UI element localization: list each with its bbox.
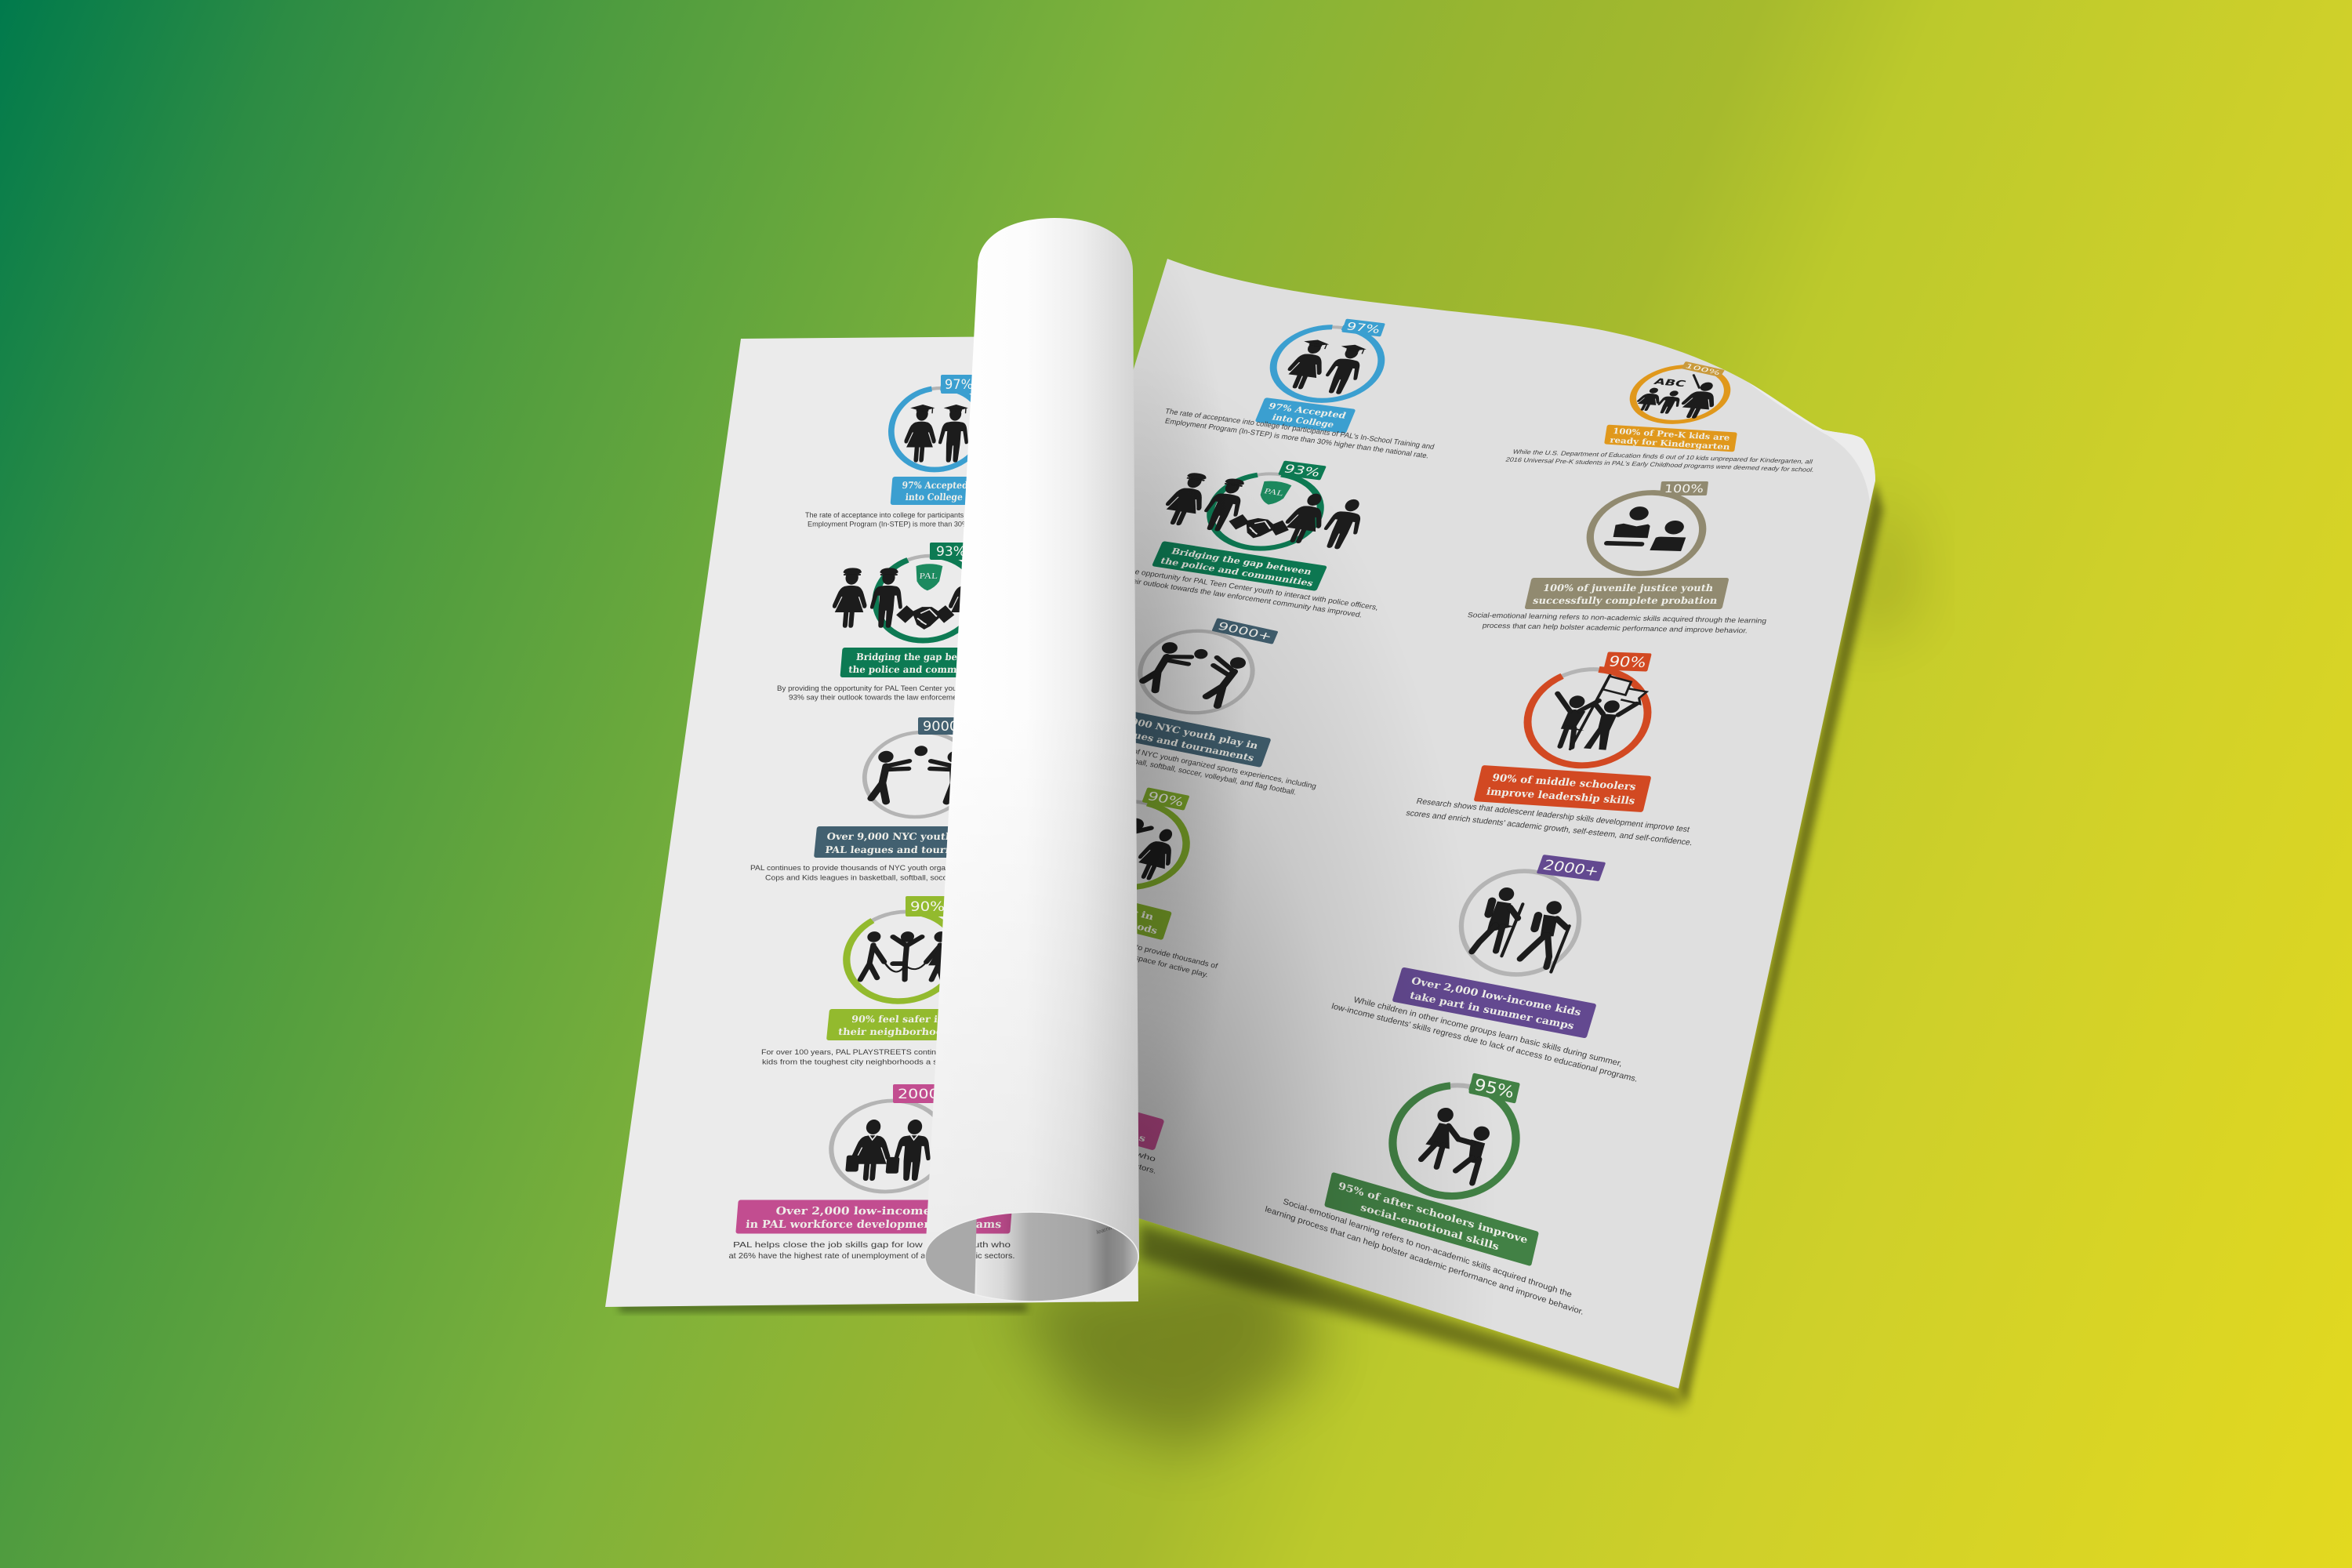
tag 93% (1278, 460, 1327, 481)
page corner curl highlight (1748, 382, 1875, 502)
panel: right sheet (869, 259, 1875, 1388)
tag 90%: 90% (910, 899, 945, 915)
body text: For over 100 years, PAL PLAYSTREETS continue to provide thousands of (959, 901, 1219, 970)
tag 90%: 90% (1607, 654, 1648, 671)
body text (1405, 797, 1697, 848)
body text: Research shows that adolescent leadership skills development improve test (1415, 797, 1690, 834)
label: Over 9,000 NYC youth play in (826, 831, 996, 842)
ground shadow along right sheet bottom edge (1139, 1223, 1686, 1408)
label (1029, 879, 1172, 940)
body text: PAL helps close the job skills gap for low income youth who (733, 1240, 1011, 1250)
label: Over 9,000 NYC youth play in (1088, 708, 1260, 751)
tag 97% (941, 375, 977, 394)
ring with officers and handshake (1152, 460, 1377, 562)
label (1255, 397, 1356, 434)
body text: Cops and Kids leagues in basketball, softball, soccer, volleyball, and flag football. (765, 873, 1055, 881)
label (891, 477, 978, 505)
ring with business figures (828, 1101, 950, 1192)
label: successfully complete probation (1532, 595, 1719, 606)
item: 2000+ summer camps (1330, 855, 1642, 1084)
tag 2000+ (893, 1084, 957, 1103)
label: 100% of Pre-K kids are (1612, 426, 1730, 443)
shading inside roll opening (983, 1212, 1138, 1301)
tag 93%: 93% (936, 544, 966, 560)
body text: Cops and Kids leagues in basketball, softball, soccer, volleyball, and flag football. (1022, 735, 1298, 797)
label: Over 2,000 low-income youth (775, 1205, 974, 1218)
inner back of roll (925, 1219, 977, 1294)
ring with playstreet figures (843, 912, 962, 1001)
body text: By providing the opportunity for PAL Teen Center youth to interact with police officers, (777, 684, 1065, 692)
ring with playstreet figures (1056, 790, 1202, 898)
label: Bridging the gap between (1170, 546, 1314, 577)
body text: Employment Program (In-STEP) is more than 30% higher than the national rate. (808, 521, 1062, 528)
ring with officers and handshake (829, 556, 1022, 641)
item: bridging the gap (right) (1080, 460, 1379, 621)
tag 97% (1341, 319, 1385, 336)
item: 90% feel safer (right) (956, 787, 1219, 980)
label: improve leadership skills (1486, 785, 1636, 807)
body text (761, 1048, 1035, 1066)
item: 90% feel safer (left) (761, 896, 1035, 1066)
tag 9000+ (1211, 618, 1279, 644)
body text: Employment Program (In-STEP) is more than 30% higher than the national rate. (1164, 417, 1430, 459)
tag 97%: 97% (1345, 320, 1382, 336)
label: 90% feel safer in (1050, 887, 1156, 922)
label: 100% of juvenile justice youth (1542, 583, 1715, 593)
right sheet paper (1129, 259, 1875, 1388)
body text (1465, 611, 1767, 635)
panel: rolled page (917, 218, 1139, 1305)
label (1474, 765, 1651, 812)
ring with greeting figures (1379, 1075, 1530, 1207)
item: 90% middle schoolers (1405, 652, 1697, 848)
tag 90% (1603, 652, 1652, 672)
body text (1080, 560, 1379, 621)
tag 97%: 97% (945, 377, 973, 393)
ring with graduates (1261, 321, 1394, 407)
tag 93%: 93% (1282, 462, 1323, 479)
label: the police and communities (1159, 556, 1316, 588)
body text (805, 511, 1064, 528)
label: PAL leagues and tournaments (1083, 720, 1256, 764)
tag 95%: 95% (1472, 1076, 1515, 1102)
label (1073, 702, 1272, 768)
label: social-emotional skills (1359, 1201, 1500, 1252)
tag 90% (1142, 787, 1190, 811)
body text: learning process that can help bolster academic performance and improve behavior. (1264, 1205, 1584, 1317)
ring with players (861, 732, 977, 817)
body text: at 26% have the highest rate of unemployment of all demographic sectors. (729, 1251, 1014, 1261)
body text: kids from the toughest city neighborhoods a safe space for active play. (762, 1058, 1033, 1066)
item: 9000+ youth play (left) (750, 717, 1070, 881)
label: 90% of middle schoolers (1491, 771, 1637, 793)
body text: 93% say their outlook towards the law enforcement community has improved. (1093, 572, 1363, 619)
body text: Social-emotional learning refers to non-academic skills acquired through the learning (1467, 611, 1767, 625)
label (1604, 425, 1737, 452)
roll lower shading (925, 218, 1139, 1257)
tag 100%: 100% (1664, 482, 1704, 495)
item: workforce development (left) (729, 1084, 1014, 1261)
label: take part in summer camps (1408, 989, 1576, 1032)
label (880, 1043, 1165, 1151)
ring with counsellor and youth (1583, 491, 1710, 575)
label: 97% Accepted (1267, 401, 1348, 420)
item: 9000+ youth play (right) (1005, 618, 1317, 800)
body text (750, 864, 1070, 881)
shadow cast on right sheet by roll (1129, 259, 1875, 1388)
tag 9000+: 9000+ (923, 719, 970, 735)
ring with teacher and kids (1621, 363, 1739, 426)
body text: 2016 Universal Pre-K students in PAL's Early Childhood programs were deemed ready for school. (1504, 456, 1815, 474)
label (840, 648, 1003, 677)
label: 90% feel safer in (851, 1014, 946, 1025)
label: the police and communities (848, 664, 993, 675)
item: workforce development (right) (869, 1043, 1165, 1175)
label: Over 2,000 low-income kids (1410, 975, 1583, 1018)
label (1392, 967, 1597, 1039)
body text: While children in other income groups learn basic skills during summer, (1352, 996, 1623, 1069)
tag 95% (1468, 1073, 1520, 1104)
label (814, 826, 1007, 858)
panel: left sheet (605, 336, 1138, 1307)
body text: By providing the opportunity for PAL Teen Center youth to interact with police officers, (1082, 560, 1379, 612)
body text: 93% say their outlook towards the law enforcement community has improved. (789, 693, 1054, 701)
tag 90% (906, 896, 949, 916)
label: ready for Kindergarten (1610, 435, 1730, 452)
item: 100% Pre-K (1504, 361, 1818, 474)
ring with players (1126, 621, 1267, 723)
ring with graduates (888, 388, 987, 470)
roll outer surface (925, 218, 1139, 1301)
body text: at 26% have the highest rate of unemployment of all demographic sectors. (869, 1087, 1157, 1175)
body text (729, 1240, 1014, 1261)
tag 100%: 100% (1683, 362, 1722, 376)
body text: PAL continues to provide thousands of NYC youth organized sports experiences, including (1007, 723, 1317, 790)
label (826, 1009, 969, 1040)
body text: kids from the toughest city neighborhoods a safe space for active play. (963, 913, 1209, 978)
tag 2000+: 2000+ (1541, 858, 1601, 880)
label: their neighborhoods (1038, 897, 1159, 936)
soft shadow near page curl (1844, 486, 1913, 643)
body text: For over 100 years, PAL PLAYSTREETS continue to provide thousands of (761, 1048, 1035, 1056)
item: bridging the gap (left) (777, 543, 1065, 701)
label: into College (1271, 412, 1336, 430)
lower shadow on right sheet (1129, 259, 1875, 1388)
body text: low-income students' skills regress due to lack of access to educational programs. (1330, 1002, 1639, 1084)
body text: process that can help bolster academic performance and improve behavior. (1482, 622, 1748, 634)
label: into College (905, 492, 964, 503)
body text: The rate of acceptance into college for participants of PAL's In-School Training and (1164, 407, 1436, 451)
label: PAL leagues and tournaments (825, 844, 994, 855)
tag 90%: 90% (1145, 789, 1186, 809)
tag 9000+: 9000+ (1216, 619, 1274, 643)
ring with officers and handshake: PAL (919, 571, 938, 581)
label (1524, 578, 1730, 609)
label (1152, 541, 1327, 591)
label: 95% of after schoolers improve (1338, 1179, 1529, 1246)
body text (869, 1076, 1160, 1175)
label (1324, 1172, 1539, 1266)
body text: PAL helps close the job skills gap for low income youth who (877, 1078, 1156, 1163)
tag 2000+: 2000+ (898, 1087, 953, 1102)
ground shadow under roll (1011, 1239, 1317, 1450)
item: 100% juvenile justice (1465, 481, 1767, 635)
tag 93% (930, 543, 972, 560)
body text: PAL continues to provide thousands of NYC youth organized sports experiences, including (750, 864, 1070, 872)
ground shadow under left sheet (619, 1303, 1027, 1312)
label: Bridging the gap between (856, 652, 988, 662)
body text: The rate of acceptance into college for participants of PAL's In-School Training and (805, 511, 1064, 519)
mirrored text inside roll: learning (1096, 1222, 1117, 1236)
ring with officers and handshake: PAL (1263, 486, 1286, 498)
label: in PAL workforce development programs (746, 1218, 1002, 1231)
left sheet paper (605, 336, 1138, 1307)
label: Over 2,000 low-income youth participate (932, 1061, 1116, 1121)
body text: While the U.S. Department of Education finds 6 out of 10 kids unprepared for Kindergarten, all (1512, 448, 1814, 465)
item: 95% after schoolers (1264, 1073, 1588, 1317)
item: 97% accepted into college (right) (1161, 319, 1436, 460)
item: 97% accepted into college (left) (805, 375, 1064, 528)
label: their neighborhoods (837, 1026, 956, 1037)
ring with teacher and kids: ABC (1652, 377, 1688, 389)
label: 97% Accepted (902, 480, 969, 491)
label (735, 1200, 1013, 1234)
body text (1504, 448, 1818, 474)
body text (777, 684, 1065, 701)
ring with hikers (1449, 863, 1592, 982)
body text: Social-emotional learning refers to non-academic skills acquired through the (1282, 1198, 1573, 1300)
label: in PAL workforce development programs (893, 1064, 1147, 1144)
body text: scores and enrich students' academic growth, self-esteem, and self-confidence. (1405, 809, 1693, 848)
roll opening rim (925, 1212, 1138, 1301)
ring with flag bearers (1517, 665, 1658, 770)
ground shadow along right sheet right edge (1679, 481, 1883, 1403)
tag 2000+ (1537, 855, 1606, 881)
